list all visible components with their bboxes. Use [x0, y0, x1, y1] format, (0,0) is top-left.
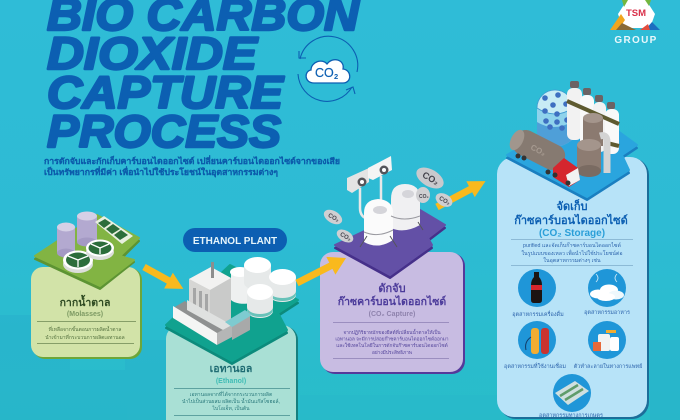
intro text: การดักจับและกักเก็บคาร์บอนไดออกไซด์ เปลี่ยนคาร์บอนไดออกไซด์จากของเสีย: [44, 155, 340, 166]
description: นำเข้ามาที่กระบวนการผลิตเอทานอล: [45, 334, 125, 341]
description: และใช้เทคโนโลยีในการดักจับก๊าซคาร์บอนไดออกไซด์: [336, 342, 448, 349]
description: เอทานอล จะมีการปล่อยก๊าซคาร์บอนไดออกไซด์ออกมา: [335, 336, 449, 342]
platform: [335, 207, 445, 278]
heading: ก๊าซคาร์บอนไดออกไซด์: [514, 213, 628, 227]
icon: CO2 cloud cycle: 2: [334, 72, 338, 81]
logo: TSM Group: [610, 0, 660, 46]
icon: beverage: [518, 269, 556, 307]
panel: CO2 capture: [320, 156, 465, 374]
card: [320, 252, 465, 374]
panel: molasses: [31, 212, 142, 359]
panel: CO2 storage: [497, 81, 649, 419]
arrow: molasses to ethanol: [140, 259, 188, 297]
title: [47, 0, 360, 157]
arrow: ethanol to capture: [292, 249, 351, 292]
card: [166, 325, 298, 420]
heading: [514, 199, 628, 227]
icon: storage equipment: [507, 81, 619, 187]
icon: food: [588, 269, 626, 307]
intro text: เป็นทรัพยากรที่มีค่า เพื่อนำไปใช้ประโยชน์ในอุตสาหกรรมต่างๆ: [44, 166, 278, 178]
subheading: (Ethanol): [216, 378, 246, 385]
label: ethanol plant: [183, 228, 287, 252]
description: purified และจัดเก็บก๊าซคาร์บอนไดออกไซด์: [523, 241, 622, 249]
platform: [35, 215, 139, 289]
subheading: (CO₂ Storage): [539, 228, 605, 239]
icon: CO2 clouds: [321, 163, 455, 245]
title: PROCESS: [47, 106, 281, 157]
label: agriculture: อุตสาหกรรมทางการเกษตร: [539, 412, 603, 419]
title: CAPTURE: [47, 67, 285, 118]
title: DIOXIDE: [47, 28, 259, 79]
subheading: (Molasses): [67, 311, 103, 318]
icon: CO2 clouds: CO₂: [419, 194, 429, 200]
label: medical: ตัวทำละลายในทางการแพทย์: [574, 363, 642, 370]
icon: CO2 cloud cycle: [298, 36, 358, 101]
description: [333, 322, 449, 359]
intro text: [44, 155, 340, 178]
panel: ethanol: [166, 257, 298, 420]
logo: TSM Group: TSM: [626, 8, 646, 19]
description: ที่เหลือจากขั้นตอนการผลิตน้ำตาล: [49, 324, 121, 333]
description: ไบโอเจ็ท, เป็นต้น: [211, 404, 250, 412]
description: [511, 239, 633, 266]
icon: storage equipment: CO₂: [529, 143, 547, 158]
icon: CO2 cloud cycle: CO: [315, 66, 334, 80]
icon: CO2 clouds: CO₂: [421, 170, 441, 187]
icon: capture silos: [347, 156, 423, 247]
icon: agriculture: [553, 374, 591, 412]
icon: plant: [173, 257, 296, 345]
description: นำไปเป็นส่วนผสม ผลิตเป็น น้ำมันแก๊สโซฮอล์,: [182, 396, 280, 405]
heading: จัดเก็บ: [556, 199, 588, 213]
description: อย่างมีประสิทธิภาพ: [372, 349, 412, 356]
logo: TSM Group: GROUP: [614, 35, 658, 46]
heading: เอทานอล: [210, 363, 252, 375]
description: [37, 321, 136, 344]
description: [174, 388, 290, 416]
icon: tanks and ponds: [57, 212, 133, 273]
icon: CO2 clouds: CO₂: [339, 232, 352, 243]
heading: ก๊าซคาร์บอนไดออกไซด์: [338, 295, 446, 308]
card: [497, 157, 649, 419]
subheading: (CO₂ Capture): [369, 311, 415, 318]
icon: CO2 clouds: CO₂: [438, 196, 451, 207]
arrow: capture to storage: [433, 173, 490, 215]
label: beverage: อุตสาหกรรมเครื่องดื่ม: [512, 310, 564, 318]
icon: welding: [518, 321, 556, 359]
icon: CO2 clouds: CO₂: [327, 213, 340, 224]
description: เอทานอลจากที่ได้จากกระบวนการผลิต: [190, 391, 272, 398]
description: ในรูปแบบของเหลว เพื่อนำไปใช้ประโยชน์ต่อ: [521, 249, 623, 257]
icon: medical: [588, 321, 626, 359]
description: ในอุตสาหกรรมต่างๆ เช่น: [543, 257, 601, 264]
label: welding: อุตสาหกรรมที่ใช้งานเชื่อม: [504, 362, 566, 370]
platform: [507, 118, 637, 200]
label: ethanol plant: ETHANOL PLANT: [193, 236, 277, 247]
heading: [338, 282, 446, 308]
card: [31, 267, 142, 359]
heading: ดักจับ: [378, 282, 406, 295]
label: food: อุตสาหกรรมอาหาร: [584, 309, 630, 316]
platform: [166, 265, 298, 364]
heading: กากน้ำตาล: [60, 294, 110, 309]
description: จากปฏิกิริยาหมักของยีสต์ที่เปลี่ยนน้ำตาลให้เป็น: [343, 328, 441, 336]
